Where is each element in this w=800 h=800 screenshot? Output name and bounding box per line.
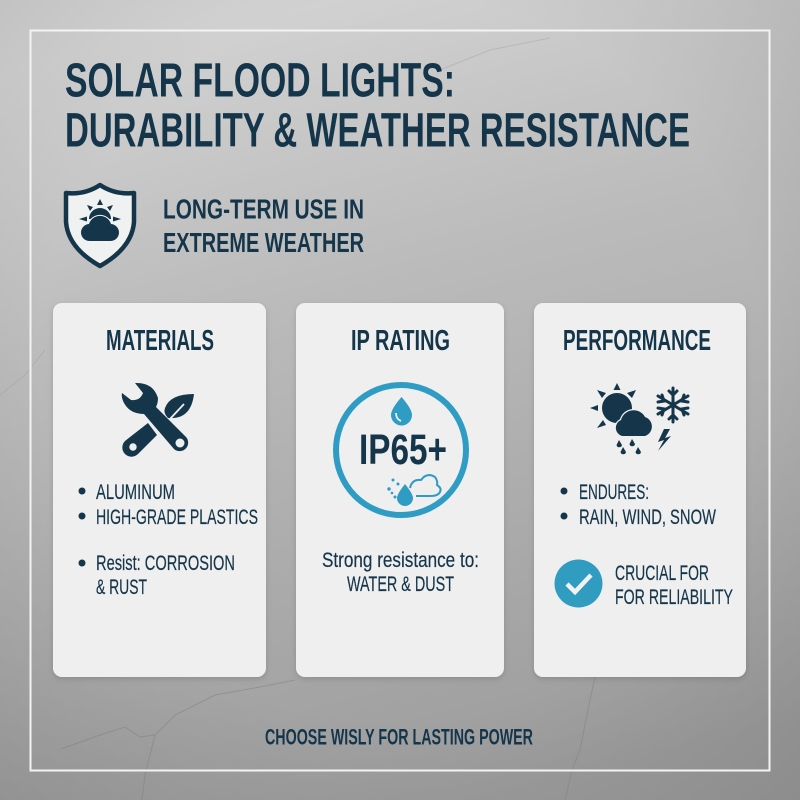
icon: IP65+ badge	[336, 385, 466, 515]
text: resistance: Strong resistance to:	[322, 549, 479, 572]
subtitle: EXTREME WEATHER	[163, 227, 364, 258]
text: resistance: WATER & DUST	[347, 573, 454, 596]
subtitle: LONG-TERM USE IN	[163, 194, 364, 224]
icon: IP65+ badge: IP65+	[359, 426, 447, 474]
heading: performance: PERFORMANCE	[563, 325, 711, 357]
title	[65, 54, 690, 158]
text: crucial for reliability: CRUCIAL FOR	[615, 562, 709, 585]
bullet list: materials: Resist: CORROSION	[96, 552, 235, 575]
heading: IP rating: IP RATING	[351, 325, 450, 357]
bullet list: materials: & RUST	[96, 576, 147, 599]
icon: shield with sun and cloud	[66, 185, 134, 266]
heading: materials: MATERIALS	[106, 325, 214, 357]
icon: check badge	[554, 560, 602, 608]
text: crucial for reliability	[615, 562, 733, 609]
bullet list: materials: HIGH-GRADE PLASTICS	[96, 506, 258, 529]
bullet list: performance: RAIN, WIND, SNOW	[579, 506, 716, 529]
text: resistance	[322, 549, 479, 596]
subtitle	[163, 194, 364, 258]
title: SOLAR FLOOD LIGHTS:	[65, 54, 455, 108]
bullet list: performance: ENDURES:	[579, 481, 649, 504]
icon: wrench and leaf	[122, 383, 194, 457]
panel: IP rating	[296, 303, 504, 677]
footer text: CHOOSE WISLY FOR LASTING POWER	[265, 724, 533, 750]
bullet list: materials: ALUMINUM	[96, 481, 175, 504]
panel: materials	[53, 303, 266, 677]
bullet list: materials	[78, 481, 258, 599]
bullet list: performance	[560, 481, 716, 529]
panel: performance	[534, 303, 746, 677]
text: crucial for reliability: FOR RELIABILITY	[615, 586, 733, 609]
icon: weather set	[590, 383, 688, 454]
